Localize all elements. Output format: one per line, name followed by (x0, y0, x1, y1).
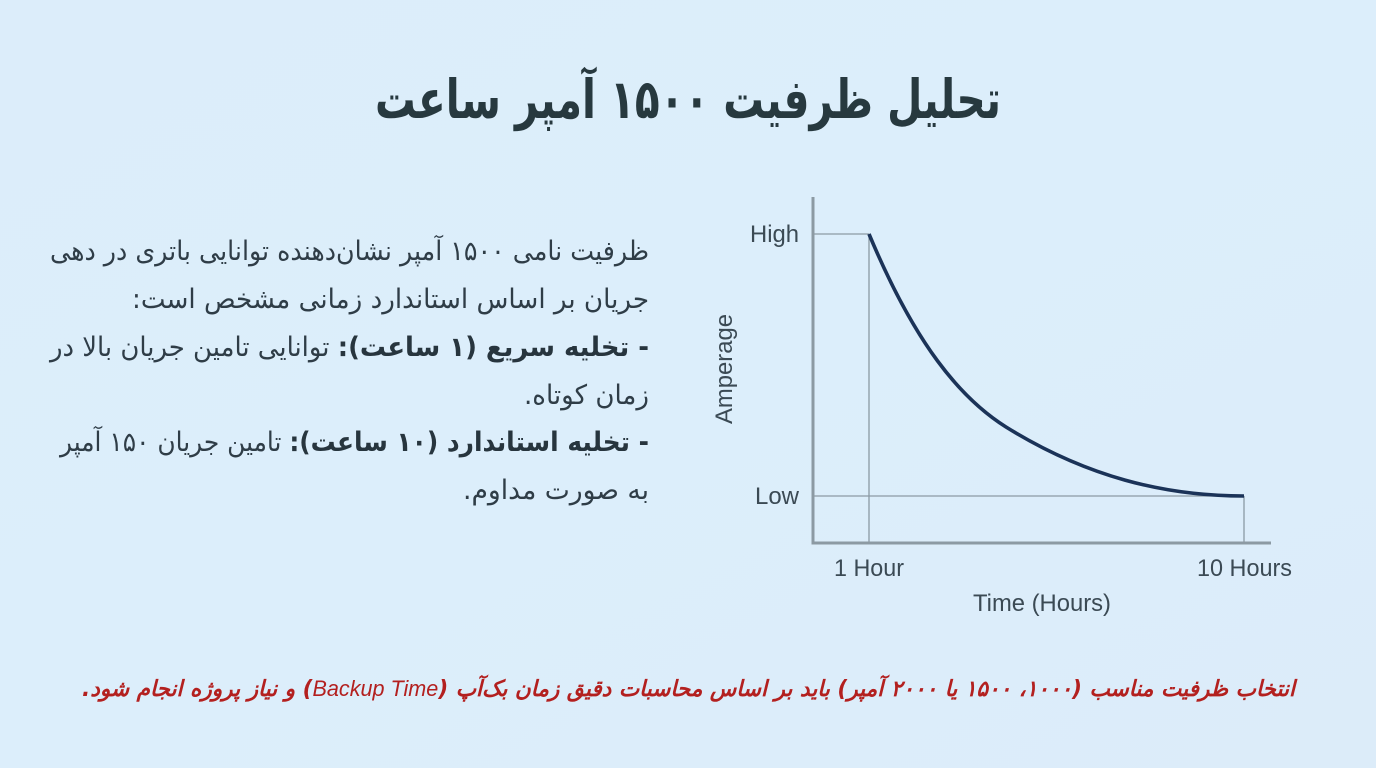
discharge curve (869, 234, 1244, 496)
line 5: standard discharge: - تخلیه استاندارد (۱۰ ساعت): تامین جریان ۱۵۰ آمپر (58, 426, 649, 458)
label: Low: Low (755, 483, 800, 510)
line 4: زمان کوتاه. (524, 380, 649, 411)
text block: capacity explanation (48, 235, 649, 506)
reference lines (813, 234, 1244, 543)
title: تحلیل ظرفیت ۱۵۰۰ آمپر ساعت (375, 66, 1001, 131)
line 6: به صورت مداوم. (463, 475, 649, 506)
label: 1 Hour: 1 Hour (834, 555, 904, 582)
footer note: انتخاب ظرفیت مناسب (۱۰۰۰، ۱۵۰۰ یا ۲۰۰۰ آمپر) باید بر اساس محاسبات دقیق زمان بک‌آپ (Backup Time) و نیاز پروژه انجام شود. (82, 674, 1298, 702)
line 1: ظرفیت نامی ۱۵۰۰ آمپر نشان‌دهنده توانایی باتری در دهی (50, 235, 649, 267)
line 3: fast discharge: - تخلیه سریع (۱ ساعت): توانایی تامین جریان بالا در (48, 332, 649, 363)
axes (813, 197, 1271, 543)
x axis title: Time (Hours) (973, 590, 1111, 617)
line 2: جریان بر اساس استاندارد زمانی مشخص است: (132, 284, 649, 315)
label: High: High (750, 221, 799, 248)
y axis title: Amperage (711, 314, 738, 424)
chart: amperage versus time (711, 197, 1292, 617)
label: 10 Hours: 10 Hours (1197, 555, 1292, 582)
